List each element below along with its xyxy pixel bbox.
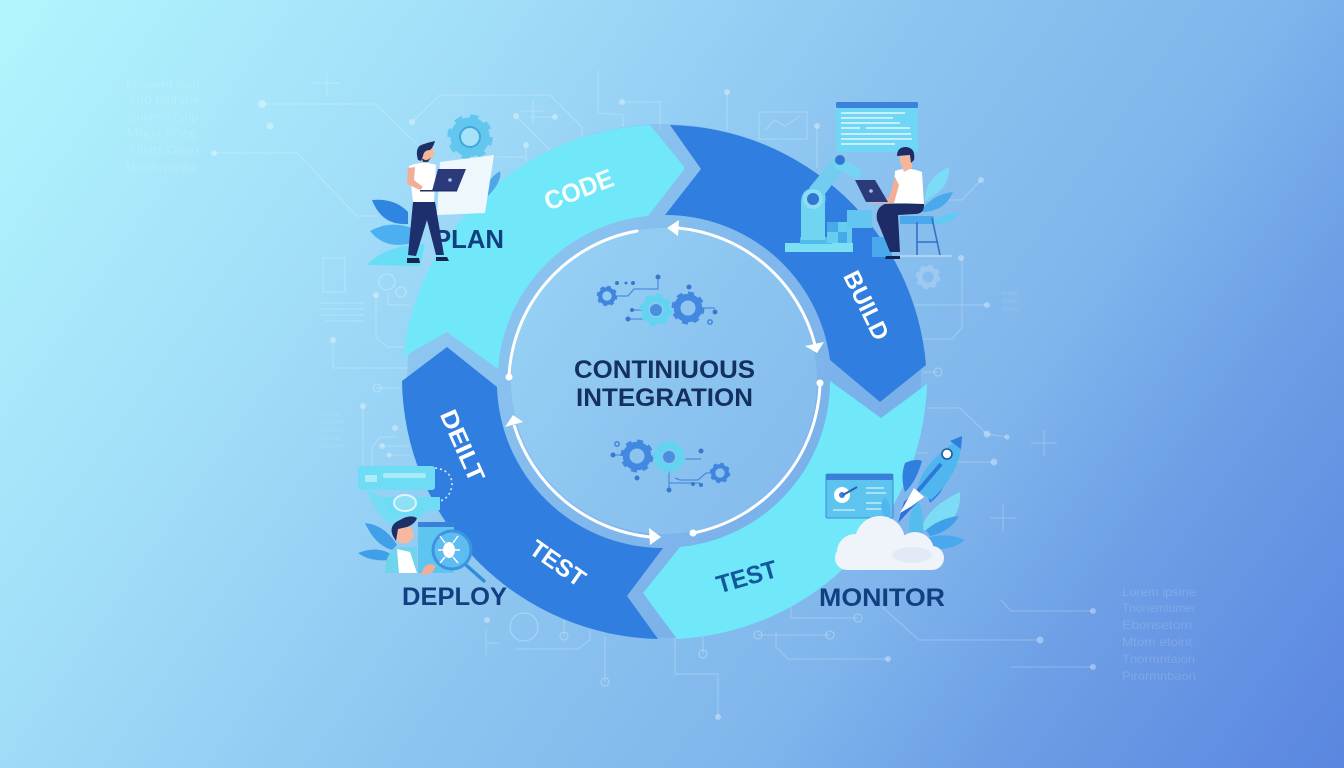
- inner arrow: bottom right arc: [690, 380, 824, 536]
- label: deploy: DEPLOY: [402, 583, 507, 611]
- illustration: monitor dashboard rocket and cloud: [826, 436, 965, 570]
- faint text block: bottom right: Lorem ipsine: [1122, 585, 1196, 599]
- title: continuous integration: CONTINIUOUS: [574, 356, 755, 384]
- label: code: CODE: [540, 163, 618, 217]
- faint text block: bottom right: Pirormnbaon: [1122, 669, 1196, 683]
- icon: plan gear: [450, 117, 490, 157]
- faint text block: top left: Lhaoem ipsd: [126, 77, 200, 91]
- segment: code: [403, 125, 685, 369]
- faint text block: bottom right: [1122, 585, 1196, 683]
- faint text block: left side: Himone: [320, 427, 344, 434]
- faint text block: top left: Cnimnn Emp: [128, 110, 198, 124]
- faint text block: right side: Hogel: [1002, 291, 1018, 297]
- icon: top gear cluster: [598, 274, 718, 325]
- inner arrow: top right arc: [667, 220, 824, 353]
- faint text block: right side: Dunen: [1002, 299, 1020, 305]
- faint text block: top left: [125, 77, 200, 175]
- faint text block: top left: Mhoit Price: [127, 126, 197, 140]
- faint text block: top left: Tho ienhine: [128, 93, 200, 107]
- label: test on light segment: TEST: [713, 555, 780, 599]
- title: continuous integration: [574, 356, 755, 412]
- faint text block: right side: [1002, 291, 1020, 313]
- faint text block: left side: Dunrei: [320, 435, 341, 442]
- faint text block: bottom right: Tnormntaion: [1122, 652, 1195, 666]
- faint text block: bottom right: Ebonsetom: [1122, 618, 1192, 632]
- illustration: plan person: [367, 141, 500, 266]
- faint text block: bottom right: Mtom etoint: [1122, 635, 1193, 649]
- faint text block: bottom right: Tnoriemtumer: [1122, 601, 1196, 615]
- faint text block: right side: Nonse: [1002, 307, 1020, 313]
- cycle band behind segments: [459, 176, 869, 586]
- inner arrow: bottom left arc: [505, 415, 661, 545]
- faint text block: left side: Dunrei: [320, 411, 341, 418]
- label: build: BUILD: [837, 267, 894, 345]
- label: deilt: DEILT: [434, 406, 490, 487]
- faint text block: left side: Nonsee: [320, 443, 344, 450]
- title: continuous integration: INTEGRATION: [576, 384, 753, 412]
- segment: test dark: [402, 347, 663, 639]
- background circuit lines: [211, 70, 1096, 720]
- illustration: deploy person and magnifier: [358, 466, 484, 581]
- segment: test light: [643, 381, 927, 639]
- inner arrow: top left arc: [506, 231, 637, 380]
- faint text block: top left: Mrommsnbe: [125, 161, 199, 175]
- faint text block: top left: Tilrm Diun: [127, 143, 199, 157]
- faint text block: left side: Nonsee: [320, 419, 344, 426]
- illustration: build person and robot: [785, 102, 960, 259]
- label: plan: PLAN: [434, 224, 504, 254]
- segment: build: [665, 125, 926, 402]
- label: monitor: MONITOR: [819, 584, 945, 612]
- label: test on dark segment: TEST: [524, 535, 591, 593]
- faint text block: left side: [320, 411, 344, 450]
- icon: bottom gear cluster: [610, 441, 729, 492]
